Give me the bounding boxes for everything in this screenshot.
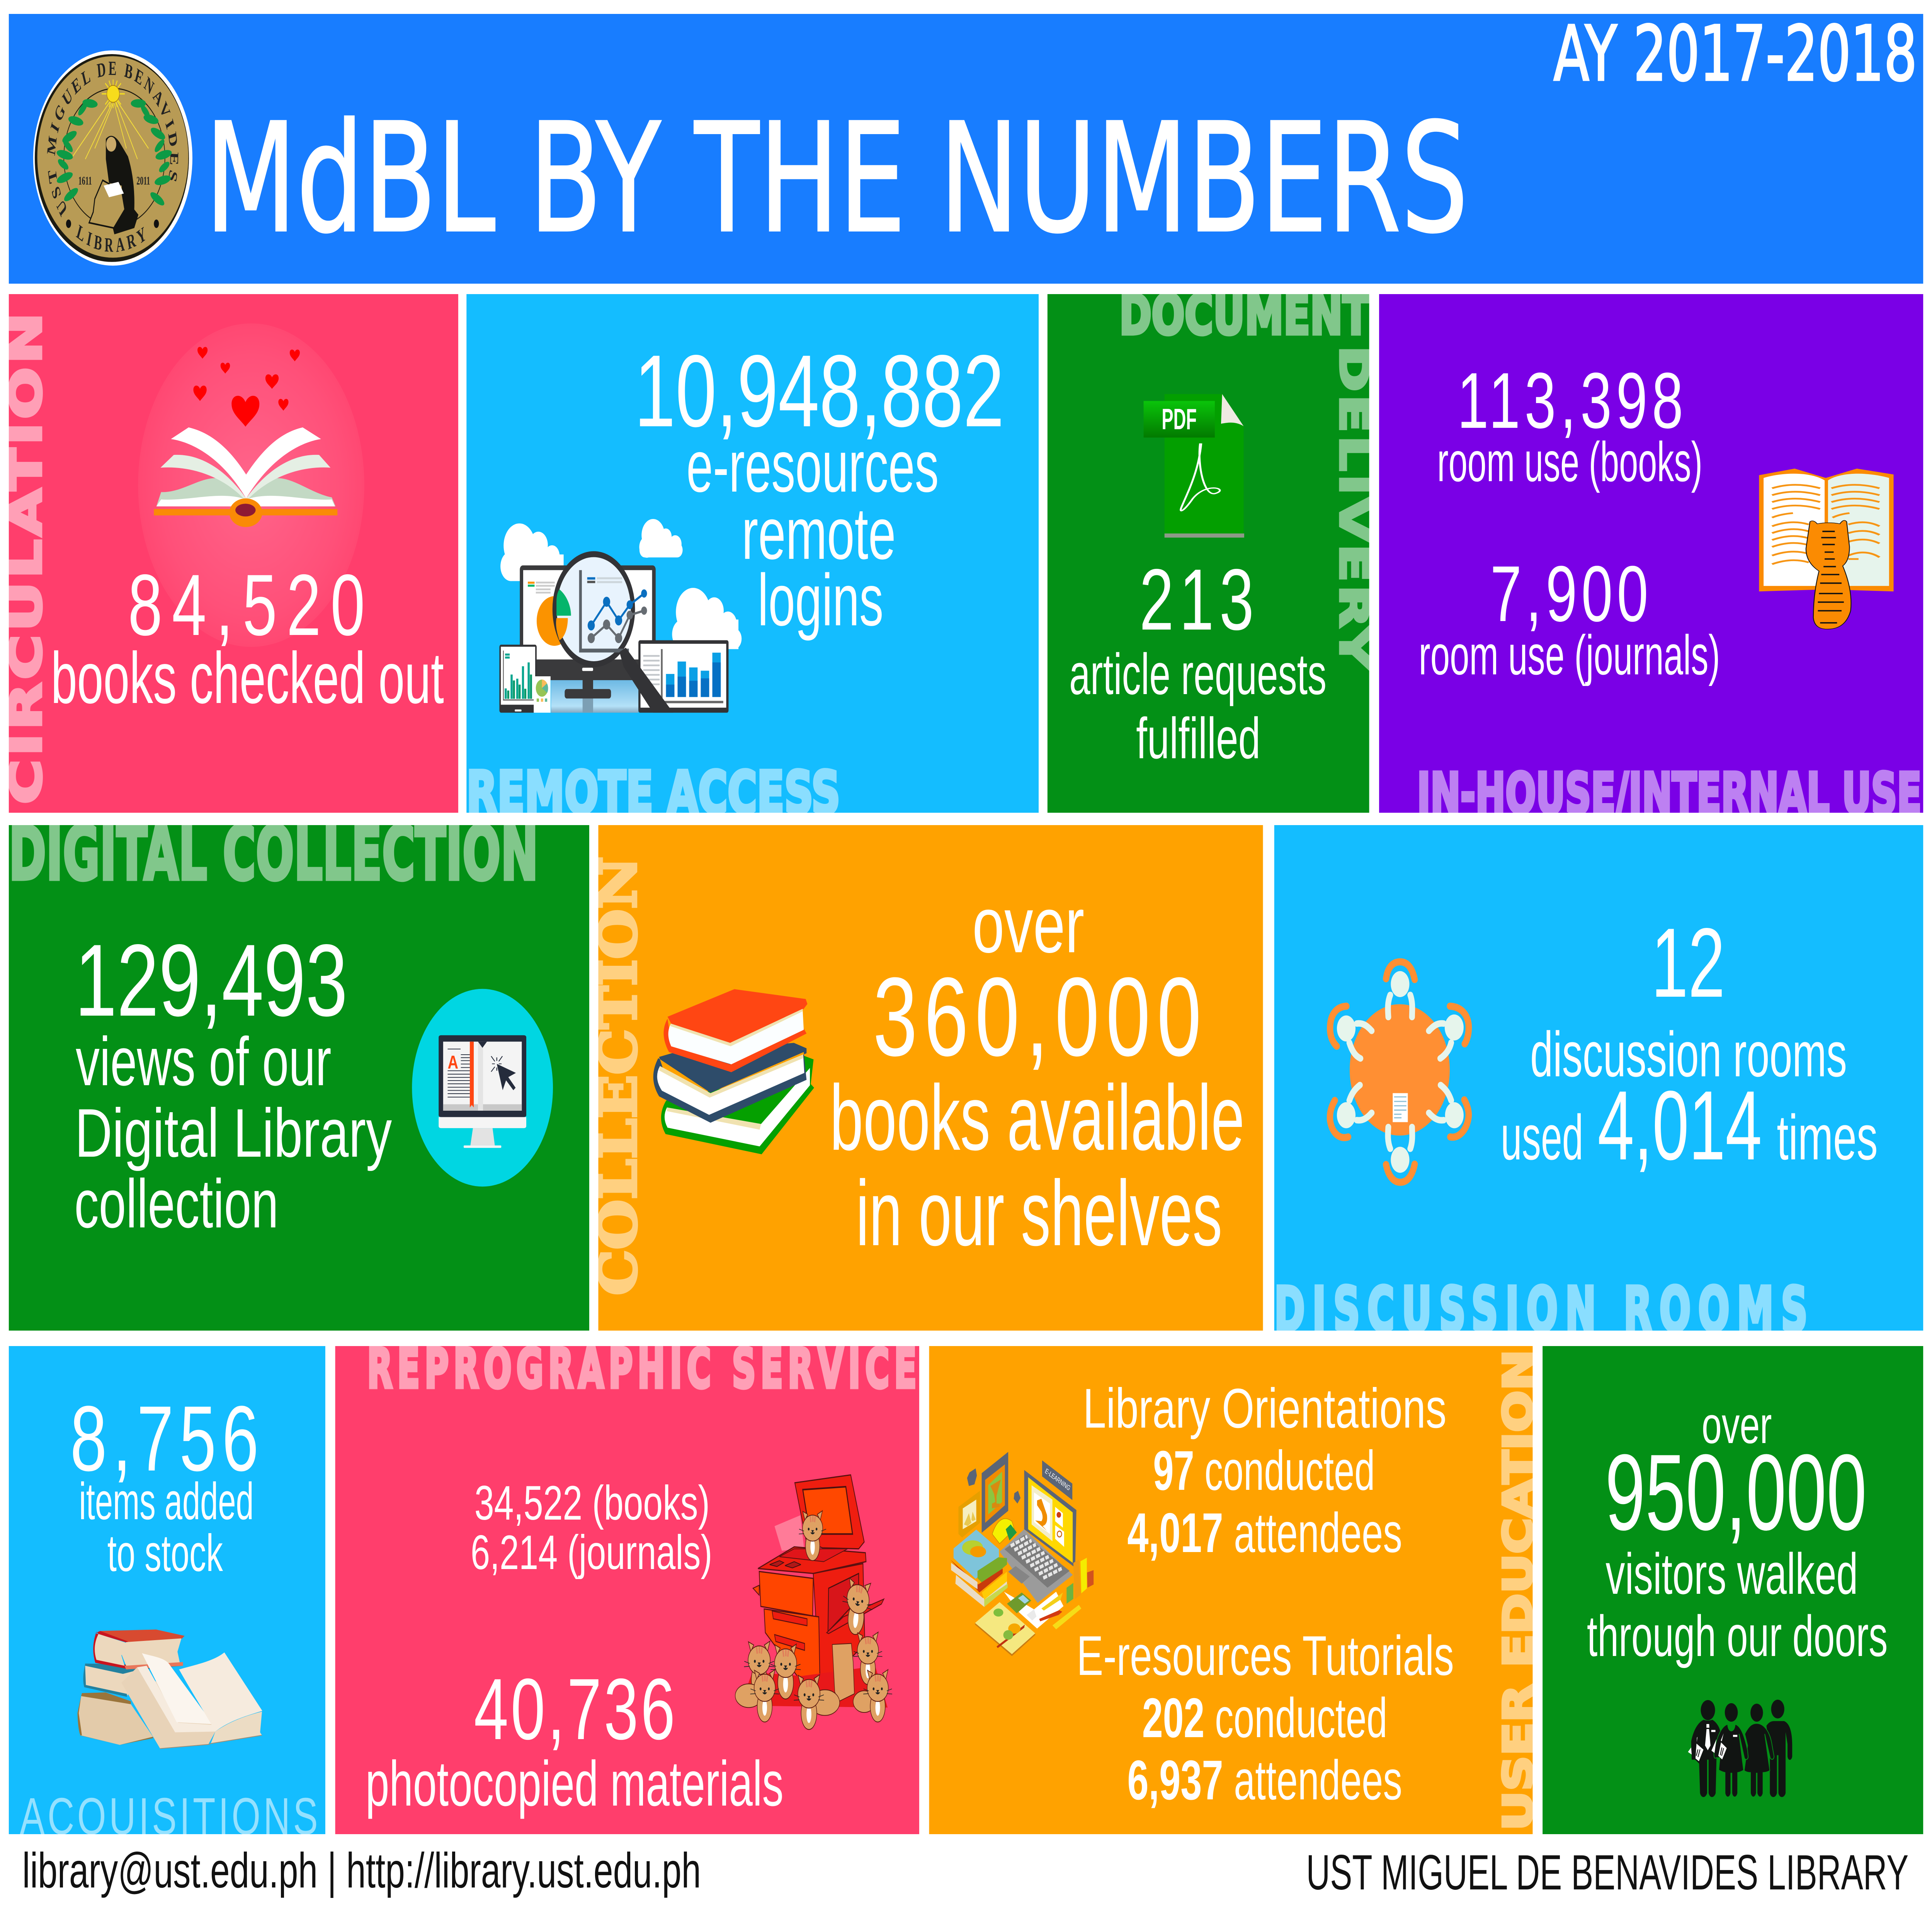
icon: library seal: LIBRARY bbox=[75, 221, 151, 257]
caption: digital library: Digital Library bbox=[75, 1094, 392, 1171]
icon: library seal bbox=[33, 50, 192, 266]
panel: reprographic service bbox=[335, 1338, 919, 1834]
label: circulation: CIRCULATION bbox=[1, 313, 51, 804]
panel: collection bbox=[588, 825, 1263, 1331]
panel: visitors bbox=[1543, 1346, 1923, 1834]
title: MdBL BY THE NUMBERS bbox=[205, 91, 1468, 266]
panel: digital collection bbox=[9, 811, 589, 1331]
number: books available: 360,000 bbox=[873, 955, 1201, 1079]
academic year: AY 2017-2018 bbox=[1554, 10, 1917, 98]
icon: people around a table bbox=[1330, 962, 1469, 1182]
icon: pdf file: PDF bbox=[1162, 403, 1197, 436]
number: books checked out: 84,520 bbox=[128, 557, 365, 654]
caption: views of our: views of our bbox=[76, 1023, 332, 1100]
footer: contact details: library@ust.edu.ph | http://library.ust.edu.ph bbox=[22, 1843, 701, 1898]
caption: books checked out: books checked out bbox=[51, 637, 444, 718]
caption: article requests: article requests bbox=[1069, 642, 1327, 706]
caption: visitors walked: visitors walked bbox=[1605, 1541, 1858, 1606]
number: room use books: 113,398 bbox=[1457, 356, 1683, 445]
caption: room use books: room use (books) bbox=[1437, 431, 1702, 493]
caption: remote: remote bbox=[742, 492, 896, 574]
caption: logins: logins bbox=[758, 559, 883, 641]
label: acquisitions: ACQUISITIONS bbox=[20, 1787, 318, 1845]
icon: stack of books bbox=[653, 989, 814, 1154]
caption: fulfilled: fulfilled bbox=[1136, 706, 1260, 771]
label: collection: COLLECTION bbox=[588, 856, 648, 1295]
caption: in our shelves: in our shelves bbox=[856, 1161, 1222, 1265]
icon: open book with hearts bbox=[138, 323, 364, 647]
icon: e-learning illustration: E-LEARNING bbox=[1044, 1467, 1071, 1492]
icon: analytics devices and clouds bbox=[499, 519, 742, 713]
stat: orientations conducted: 97 conducted bbox=[1153, 1439, 1375, 1502]
label: remote access: REMOTE ACCESS bbox=[466, 759, 840, 827]
caption: through our doors: through our doors bbox=[1587, 1604, 1888, 1669]
icon: group of people bbox=[1688, 1700, 1792, 1797]
number: article requests: 213 bbox=[1139, 551, 1254, 648]
caption: room use journals: room use (journals) bbox=[1419, 624, 1720, 686]
icon: library seal: UST MIGUEL DE BENAVIDES bbox=[44, 58, 181, 220]
label: reprographic service: REPROGRAPHIC SERVICE bbox=[367, 1338, 917, 1401]
number: room use journals: 7,900 bbox=[1490, 550, 1648, 638]
panel: in-house internal use bbox=[1379, 294, 1923, 826]
panel: user education bbox=[929, 1346, 1541, 1834]
caption: books photocopied: 34,522 (books) bbox=[474, 1476, 710, 1530]
icon: books and open book bbox=[78, 1629, 262, 1749]
icon: e-learning illustration bbox=[951, 1452, 1094, 1656]
icon: tiger reading a book bbox=[1759, 469, 1894, 629]
caption: photocopied materials: photocopied materials bbox=[366, 1748, 784, 1819]
caption: used 4,014 times: times bbox=[1777, 1102, 1878, 1173]
label: user education: USER EDUCATION bbox=[1495, 1350, 1541, 1831]
caption: used 4,014 times: 4,014 bbox=[1598, 1071, 1762, 1180]
heading: e-resources tutorials: E-resources Tutorials bbox=[1077, 1624, 1454, 1687]
caption: over: over bbox=[1702, 1396, 1772, 1454]
number: digital library views: 129,493 bbox=[75, 923, 348, 1037]
label: document: DOCUMENT bbox=[1119, 284, 1369, 347]
number: remote logins: 10,948,882 bbox=[634, 334, 1004, 448]
panel: header bbox=[9, 10, 1923, 284]
caption: used 4,014 times: used bbox=[1501, 1102, 1583, 1173]
caption: e-resources: e-resources bbox=[686, 425, 939, 507]
caption: discussion rooms: discussion rooms bbox=[1530, 1019, 1847, 1090]
icon: library seal: 1611 bbox=[78, 175, 92, 187]
icon: computer with digital book: A bbox=[447, 1052, 458, 1073]
label: digital collection: DIGITAL COLLECTION bbox=[9, 811, 538, 897]
panel: circulation bbox=[1, 294, 458, 813]
caption: to stock: to stock bbox=[107, 1524, 223, 1582]
icon: pdf file bbox=[1144, 394, 1244, 538]
caption: used 4,014 times bbox=[1501, 1071, 1878, 1180]
stat: tutorial attendees: 6,937 attendees bbox=[1127, 1749, 1402, 1811]
icon: library seal: 2011 bbox=[136, 175, 150, 187]
label: delivery: DELIVERY bbox=[1331, 346, 1376, 669]
caption: journals photocopied: 6,214 (journals) bbox=[471, 1525, 712, 1579]
number: items added: 8,756 bbox=[70, 1387, 259, 1491]
caption: collection: collection bbox=[74, 1165, 279, 1242]
panel: remote access bbox=[466, 294, 1039, 827]
footer: library name: UST MIGUEL DE BENAVIDES LIBRARY bbox=[1306, 1845, 1908, 1900]
icon: computer with digital book bbox=[412, 989, 553, 1186]
caption: items added: items added bbox=[79, 1472, 254, 1530]
caption: over: over bbox=[972, 881, 1084, 969]
label: in-house internal use: IN-HOUSE/INTERNAL USE bbox=[1417, 762, 1922, 826]
number: visitors: 950,000 bbox=[1605, 1432, 1867, 1553]
stat: tutorials conducted: 202 conducted bbox=[1142, 1687, 1387, 1749]
number: photocopied materials: 40,736 bbox=[474, 1661, 675, 1758]
panel: discussion rooms bbox=[1274, 825, 1923, 1345]
heading: library orientations: Library Orientations bbox=[1083, 1377, 1447, 1440]
number: discussion rooms: 12 bbox=[1651, 908, 1725, 1018]
icon: copier with kittens bbox=[735, 1475, 892, 1729]
label: discussion rooms: DISCUSSION ROOMS bbox=[1274, 1274, 1808, 1345]
panel: document delivery bbox=[1048, 284, 1376, 813]
panel: acquisitions bbox=[9, 1346, 325, 1845]
stat: orientation attendees: 4,017 attendees bbox=[1127, 1501, 1402, 1564]
caption: books available: books available bbox=[830, 1066, 1245, 1170]
